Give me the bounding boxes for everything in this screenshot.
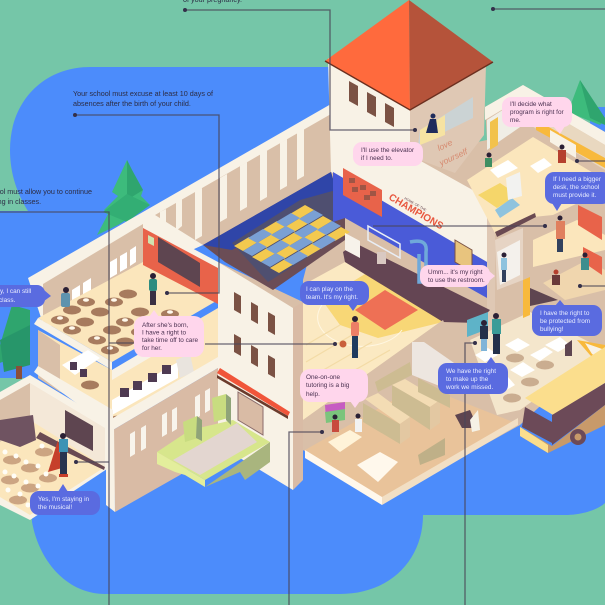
bubble: team <box>300 281 369 311</box>
school bus <box>520 347 605 453</box>
bubble: time off: take time off to care <box>142 337 198 344</box>
bubble: make up work: We have the right <box>446 368 496 375</box>
note: excuse absences text: Your school must excuse at least 10 days of <box>73 89 213 98</box>
music room <box>0 375 110 520</box>
bubble: bigger desk <box>545 172 605 211</box>
person in tower window <box>426 114 438 133</box>
bubble: program: program is right for <box>510 109 564 116</box>
champions gym wall <box>333 168 495 336</box>
tower walls, roof and window <box>325 0 493 262</box>
bubble: bullying <box>532 300 602 336</box>
right wing lower rooms <box>495 205 605 300</box>
bubble: tutoring: One-on-one <box>306 374 341 381</box>
long back wall <box>28 104 331 330</box>
bubble: make up work: to make up the <box>446 376 489 383</box>
bubble: time off <box>134 310 204 357</box>
bubble: make up work <box>438 357 508 394</box>
champions gym wall: HOME OF THE <box>404 196 428 213</box>
bubble: tutoring: help. <box>306 391 320 398</box>
connector: branch to time off bubble <box>109 342 134 344</box>
tower walls, roof and window: yourself <box>437 145 470 168</box>
connector: right upper <box>577 160 605 162</box>
tower windows <box>349 81 394 127</box>
teacher <box>149 273 157 305</box>
right wing top classroom <box>467 97 605 237</box>
bubble: restroom: to use the restroom. <box>428 277 485 284</box>
left wing upper classroom <box>34 222 218 370</box>
tower roof <box>325 0 410 110</box>
connector: excuse absences <box>75 115 219 293</box>
bubble: bullying: I have the right to <box>540 310 590 317</box>
note: excuse absences text: absences after the birth of your child. <box>73 99 191 108</box>
bottom right classroom <box>455 277 605 432</box>
people and rainbow flag <box>325 402 362 432</box>
two students <box>480 313 501 354</box>
bubble: bullying: bullying! <box>540 326 564 333</box>
bubble: elevator: if I need to. <box>361 155 393 162</box>
bubble: program: I'll decide what <box>510 101 552 108</box>
bubble: tutoring: tutoring is a big <box>306 382 350 389</box>
tree: back right <box>568 80 605 125</box>
bubble: program <box>502 97 572 134</box>
bubble: musical: the musical! <box>38 504 72 511</box>
seating and table <box>357 452 398 482</box>
bubble: bigger desk: desk, the school <box>553 184 599 191</box>
bubble: elevator: I'll use the elevator <box>361 147 415 154</box>
bubble: time off: After she's born, <box>142 322 189 329</box>
seat rows <box>234 205 350 273</box>
bubble: stay in class <box>0 285 51 307</box>
bubble: bigger desk: must provide it. <box>553 192 597 199</box>
auditorium with seats <box>203 172 350 290</box>
lime bench <box>157 394 270 487</box>
bubble: tutoring <box>300 369 368 408</box>
tree: back left <box>97 160 150 235</box>
basketball hoop <box>345 226 426 282</box>
connector: top right note <box>493 8 605 10</box>
bubble: bullying: be protected from <box>540 318 590 325</box>
left wing lower computer room <box>34 308 218 430</box>
bubble: team: team. It's my right. <box>306 294 358 301</box>
connector: top pregnancy note <box>185 10 415 130</box>
bubble: restroom: Umm... it's my right <box>428 269 483 276</box>
library <box>303 320 518 505</box>
right wing back wall <box>485 85 605 145</box>
gym court floor <box>303 226 490 420</box>
connector: gym to desk room <box>373 225 545 227</box>
champions gym wall: CHAMPIONS <box>386 192 445 232</box>
connector: tutoring <box>289 432 322 605</box>
connector: continue classes <box>0 212 109 605</box>
bubble: elevator <box>353 142 423 166</box>
person in cape <box>48 433 68 477</box>
connector: right lower <box>580 285 605 287</box>
student at left <box>61 287 70 307</box>
tree: lower left <box>0 305 30 379</box>
book shelves <box>363 362 450 465</box>
wall lettering: love <box>436 137 454 153</box>
connector: player <box>205 343 335 345</box>
bubble: time off: I have a right to <box>142 330 186 336</box>
bubble: musical <box>30 484 100 515</box>
bubble: make up work: work we missed. <box>445 384 493 391</box>
mid block with windows and awning <box>217 262 303 490</box>
bubble: bigger desk: If I need a bigger <box>553 176 602 183</box>
bubble: program: me. <box>510 117 521 124</box>
bubble: team: I can play on the <box>306 286 353 293</box>
bubble: restroom <box>420 265 495 287</box>
connector: make up work <box>465 343 475 605</box>
bubble: time off: for her. <box>142 345 162 352</box>
solid building base <box>218 85 605 502</box>
player with ball <box>340 316 359 358</box>
connector: branch to musical <box>76 461 109 463</box>
front beige wall with windows <box>106 368 218 512</box>
bubble: musical: Yes, I'm staying in <box>38 496 90 503</box>
